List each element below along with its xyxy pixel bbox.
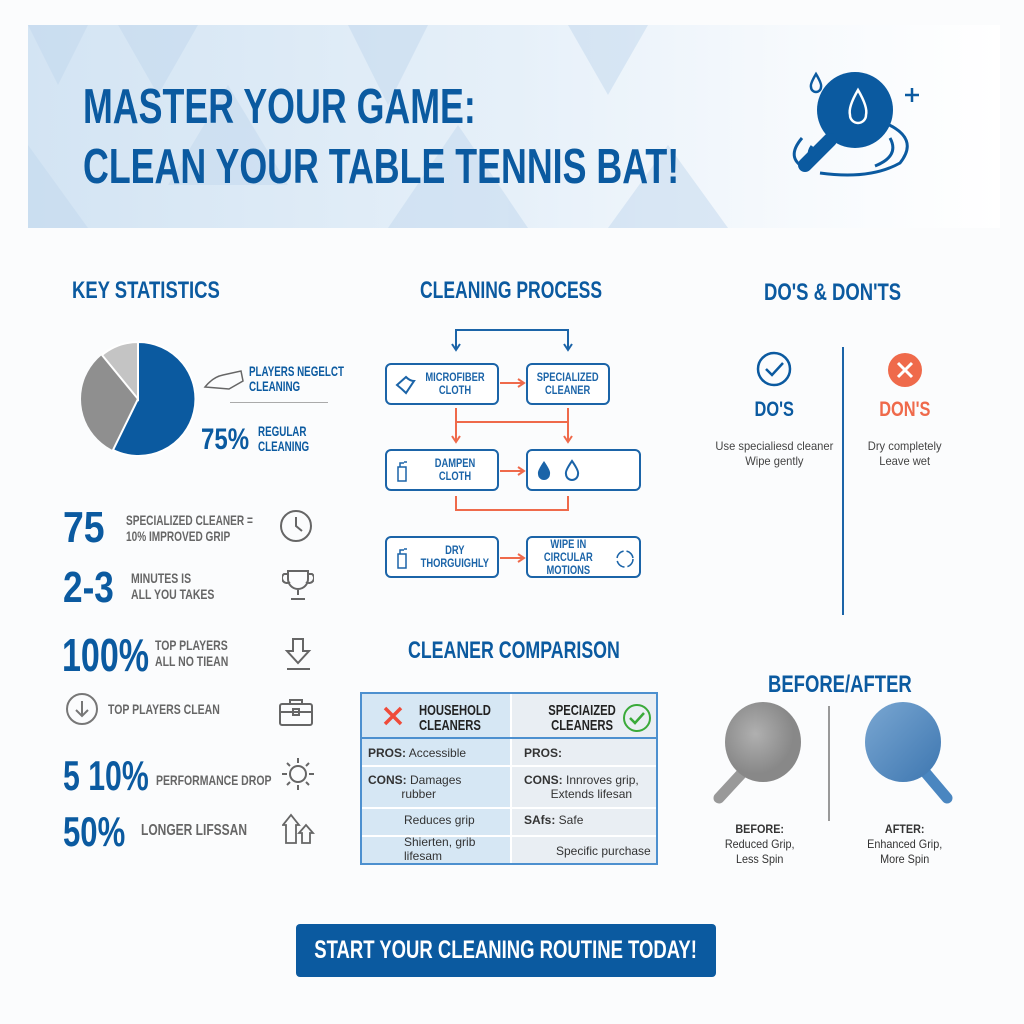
comparison table: SAfs: Safe [524, 813, 583, 827]
pie legend: CLEANING [258, 438, 309, 454]
step: wipe circular: CIRCULAR [544, 550, 593, 564]
comparison table: HOUSEHOLD [419, 702, 491, 719]
stats list: LONGER LIFSSAN [141, 822, 247, 839]
step: dry thoroughly [385, 536, 499, 578]
before/after illustration: AFTER: [885, 822, 925, 836]
stats list: ALL NO TIEAN [155, 653, 228, 669]
comparison table: SPECIAIZED [548, 702, 616, 719]
heading: key statistics: KEY STATISTICS [72, 277, 220, 304]
comparison table: CLEANERS [551, 717, 613, 734]
pie legend: PLAYERS NEGELCT [249, 363, 344, 379]
step: wipe circular: WIPE IN [551, 536, 586, 550]
before/after illustration: Reduced Grip, [725, 837, 795, 851]
title: MASTER YOUR GAME: [83, 80, 476, 134]
stats list: 5 10% [63, 752, 149, 799]
step: dry thoroughly: THORGUIGHLY [421, 556, 489, 570]
step: specialized cleaner [526, 363, 610, 405]
pie chart [81, 343, 194, 455]
heading: cleaning process: CLEANING PROCESS [420, 277, 602, 304]
pie legend [201, 363, 344, 456]
header banner [28, 25, 1000, 228]
step: specialized cleaner: SPECIALIZED [537, 370, 599, 384]
do's column [715, 352, 834, 468]
comparison table: Shierten, grib [404, 835, 475, 849]
step: drops [526, 449, 641, 491]
comparison table: CONS: Innroves grip, [524, 773, 639, 787]
heading: cleaner comparison: CLEANER COMPARISON [408, 637, 620, 664]
stats list: 50% [63, 808, 125, 855]
step: dampen cloth: DAMPEN [435, 456, 475, 470]
before/after illustration: More Spin [880, 852, 930, 866]
do's column: DO'S [754, 398, 794, 421]
title: CLEAN YOUR TABLE TENNIS BAT! [83, 140, 679, 194]
stats list: 2-3 [63, 563, 114, 612]
call to action button [296, 924, 716, 977]
step: microfiber cloth: MICROFIBER [425, 370, 485, 384]
title [83, 80, 679, 194]
heading: before/after: BEFORE/AFTER [768, 671, 912, 698]
pie legend: REGULAR [258, 423, 306, 439]
comparison table: Specific purchase [556, 844, 651, 858]
before/after illustration: Enhanced Grip, [867, 837, 943, 851]
call to action button: START YOUR CLEANING ROUTINE TODAY! [315, 936, 697, 964]
don'ts column: Leave wet [880, 454, 930, 468]
flowchart [385, 329, 641, 578]
step: dampen cloth [385, 449, 499, 491]
divider [842, 347, 844, 615]
stats list: TOP PLAYERS [155, 637, 228, 653]
stats list: 10% IMPROVED GRIP [126, 528, 230, 544]
step: microfiber cloth [385, 363, 499, 405]
step: microfiber cloth: CLOTH [439, 383, 471, 397]
comparison table: PROS: [524, 746, 562, 760]
stats list: MINUTES IS [131, 570, 191, 586]
stats list: TOP PLAYERS CLEAN [108, 701, 220, 717]
don'ts column: DON'S [879, 398, 931, 421]
stats list: SPECIALIZED CLEANER = [126, 512, 253, 528]
comparison table: lifesam [404, 849, 442, 863]
before/after illustration: Less Spin [736, 852, 784, 866]
do's column: Wipe gently [745, 454, 803, 468]
pie legend: CLEANING [249, 378, 300, 394]
comparison table: Extends lifesan [551, 787, 632, 801]
stats list [62, 503, 315, 855]
before/after illustration: BEFORE: [736, 822, 784, 836]
icon: bat with water [792, 72, 919, 176]
stats list: ALL YOU TAKES [131, 586, 214, 602]
step: specialized cleaner: CLEANER [545, 383, 591, 397]
don'ts column: Dry completely [868, 439, 942, 453]
step: dry thoroughly: DRY [445, 543, 465, 557]
comparison table [360, 692, 658, 865]
comparison table: CLEANERS [419, 717, 481, 734]
heading: do's and don'ts: DO'S & DON'TS [764, 279, 901, 306]
stats list: PERFORMANCE DROP [156, 772, 272, 788]
stats list: 100% [62, 629, 149, 681]
comparison table: CONS: Damages [368, 773, 461, 787]
do's column: Use specialiesd cleaner [715, 439, 833, 453]
don'ts column [868, 353, 942, 468]
step: wipe circular [526, 536, 641, 578]
step: wipe circular: MOTIONS [547, 562, 590, 576]
step: dampen cloth: CLOTH [439, 469, 471, 483]
stats list: 75 [63, 503, 105, 552]
before/after illustration [714, 702, 952, 866]
comparison table: Reduces grip [404, 813, 475, 827]
pie legend: 75% [201, 423, 249, 456]
comparison table: PROS: Accessible [368, 746, 466, 760]
comparison table: rubber [401, 787, 436, 801]
